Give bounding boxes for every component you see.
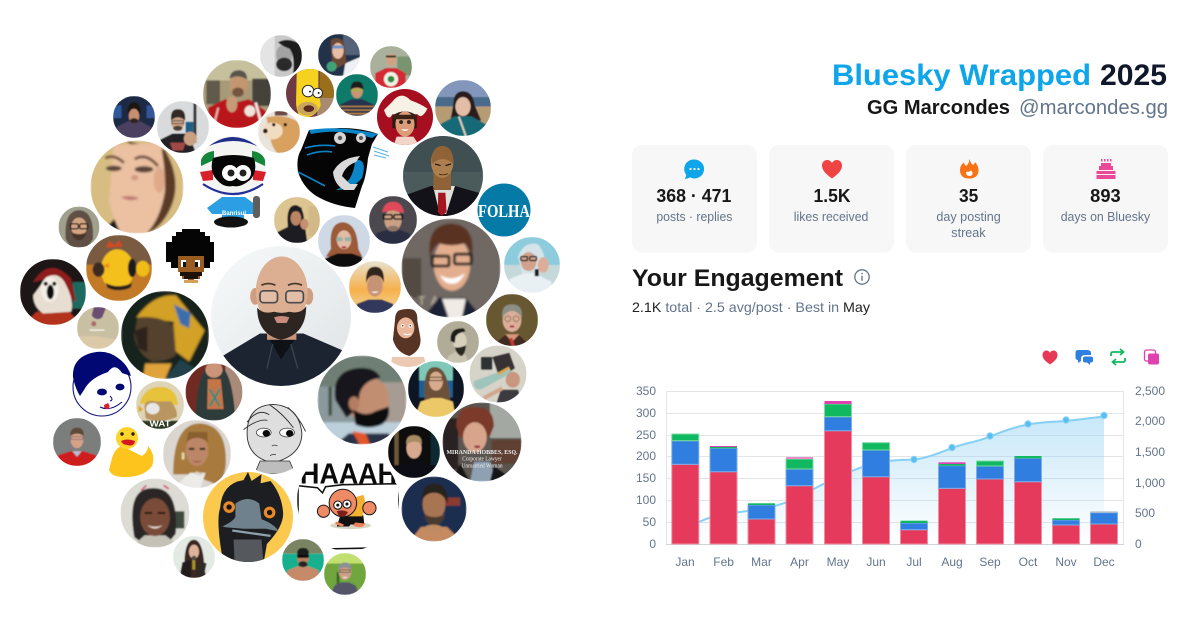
- avatar: racing helmet mascot: Banrisul: [222, 211, 246, 217]
- cumulative area: [685, 416, 1104, 544]
- avatar: black and white man: [260, 35, 302, 77]
- avatar: small painted portrait: [77, 307, 119, 349]
- avatar: beard silhouette drawing: [437, 321, 479, 363]
- stat card: posts and replies: 368 · 471: [656, 186, 731, 206]
- avatar: blue cartoon boy: [73, 352, 131, 416]
- month labels: Feb: [713, 555, 734, 569]
- left axis labels: 0: [649, 537, 656, 551]
- avatar: Miranda Hobbes: Corporate Lawyer: [462, 457, 502, 463]
- stat card: days on Bluesky: days on Bluesky: [1061, 209, 1151, 224]
- avatar: Miranda Hobbes: MIRANDA HOBBES, ESQ.: [446, 449, 518, 456]
- legend: heart: [1042, 350, 1058, 364]
- left axis labels: 350: [636, 384, 656, 398]
- avatar: Miranda Hobbes: Unmarried Woman: [461, 463, 503, 469]
- stat card: day posting streak: [906, 145, 1031, 252]
- icon: chat bubble: [684, 159, 704, 179]
- avatar: Girl with a Pearl Earring style: [121, 291, 209, 379]
- avatar: mirror selfie man: [157, 101, 209, 153]
- avatar: emu illustration: [203, 472, 293, 562]
- avatar: frog with hard hat: WAT: [149, 420, 171, 429]
- avatar: Homer Simpson: [286, 69, 334, 117]
- avatar: man in red shirt: [370, 46, 412, 88]
- avatar: man on teal background: [336, 74, 378, 116]
- avatar: man at sunset: [349, 261, 401, 313]
- month labels: Oct: [1019, 555, 1038, 569]
- month labels: [675, 555, 1115, 569]
- avatar: racing helmet mascot: [200, 136, 266, 228]
- legend: reposts: [1111, 349, 1125, 365]
- avatar: red-haired woman: [318, 215, 370, 267]
- bar: Jul: [900, 521, 928, 544]
- legend: quotes: [1144, 350, 1159, 364]
- icon: info: [855, 270, 869, 284]
- left axis labels: 300: [636, 406, 656, 420]
- line points: [911, 412, 1107, 463]
- avatar: woman in white hood: [504, 237, 560, 293]
- avatar: woman with sunglasses: [318, 34, 360, 76]
- bar: Jun: [862, 443, 890, 544]
- bar: Sep: [976, 461, 1004, 544]
- legend: replies: [1076, 350, 1093, 365]
- month labels: Mar: [751, 555, 772, 569]
- icon: heart: [822, 160, 842, 178]
- avatar: man in red cap: [369, 196, 417, 244]
- month labels: Sep: [979, 555, 1001, 569]
- avatar: HAAAA comic: [297, 464, 399, 550]
- bar: Jan: [672, 434, 699, 544]
- engagement summary: 2.1K total · 2.5 avg/post · Best in May: [632, 299, 870, 315]
- avatar: golden dog: [258, 111, 300, 153]
- user name and handle: @marcondes.gg: [1019, 97, 1168, 119]
- avatar: man in red sweater: [53, 418, 101, 466]
- month labels: Apr: [790, 555, 809, 569]
- right axis labels: [1135, 384, 1165, 551]
- avatar: woman with glasses: [486, 294, 538, 346]
- icon: birthday cake: [1096, 159, 1116, 179]
- avatar: man with guitar: [470, 346, 526, 402]
- bar: May: [824, 401, 852, 544]
- left axis labels: 250: [636, 428, 656, 442]
- avatar: glamorous woman with blonde hair: [163, 420, 231, 488]
- avatar: man in white cowboy hat: [377, 89, 433, 145]
- avatar: man in black shirt: [388, 426, 440, 478]
- right axis labels: 2,000: [1135, 414, 1165, 428]
- title: Bluesky Wrapped 2025: 2025: [1100, 59, 1167, 92]
- heading: Your Engagement: Your Engagement: [632, 265, 843, 292]
- month labels: Jul: [906, 555, 922, 569]
- avatar: yellow robot chick: [86, 235, 152, 301]
- avatar: big selfie woman: [90, 140, 184, 234]
- stat card: likes received: [769, 145, 894, 252]
- avatar: sketched grumpy kid: [243, 404, 306, 474]
- right axis labels: 0: [1135, 537, 1142, 551]
- avatar: smiling man with glasses: [402, 218, 500, 318]
- avatar: woman selfie with hand: [274, 197, 320, 243]
- right axis labels: 1,000: [1135, 476, 1165, 490]
- stat card: days on Bluesky: 893: [1090, 186, 1121, 206]
- right axis labels: 1,500: [1135, 445, 1165, 459]
- left axis labels: 200: [636, 449, 656, 463]
- stat card: likes received: likes received: [794, 209, 868, 224]
- stat card: posts and replies: [632, 145, 757, 252]
- avatar: man in red jacket: [203, 60, 271, 128]
- avatar: Carolina Panthers logo: [297, 128, 389, 208]
- avatar: HAAAA comic: HAAAH: [300, 459, 397, 491]
- bar: Oct: [1014, 456, 1042, 544]
- avatar: long-haired man in yellow shirt: [408, 361, 464, 417]
- stat card: days on Bluesky: [1043, 145, 1168, 252]
- right axis labels: 500: [1135, 506, 1155, 520]
- bar: Nov: [1052, 518, 1080, 544]
- avatar: frog with hard hat: [136, 381, 184, 429]
- month labels: Nov: [1055, 555, 1077, 569]
- month labels: Jan: [675, 555, 695, 569]
- bar: Mar: [748, 503, 775, 544]
- avatar: Miranda Hobbes: [442, 402, 522, 482]
- avatar: woman with patterned top: [186, 362, 242, 420]
- user name and handle: [867, 97, 1168, 119]
- bar: Feb: [710, 446, 737, 544]
- avatar: man with dark background: [113, 96, 155, 138]
- avatar: bald man with hand on chin: [402, 476, 466, 542]
- stacked bars: [672, 401, 1118, 544]
- avatar: Art the Clown in santa suit: [20, 259, 86, 325]
- bar: Apr: [786, 457, 813, 544]
- avatar: man with long hair and glasses: [58, 206, 100, 248]
- avatar: smiling man with glasses: I T A: [409, 294, 439, 308]
- left axis labels: 100: [636, 493, 656, 507]
- right axis labels: 2,500: [1135, 384, 1165, 398]
- month labels: Jun: [866, 555, 886, 569]
- bar: Dec: [1090, 511, 1118, 544]
- chart legend icons: [1042, 349, 1159, 365]
- avatar: rubber duck: [109, 427, 153, 477]
- avatar cloud: [20, 34, 560, 595]
- avatar: man in sunglasses at sea: [282, 539, 324, 581]
- left axis labels: 150: [636, 471, 656, 485]
- month labels: Dec: [1093, 555, 1115, 569]
- bar: Aug: [938, 462, 966, 544]
- month labels: May: [827, 555, 849, 569]
- chart: monthly engagement bars and cumulative line: [636, 384, 1165, 569]
- avatar: woman at the beach: [435, 80, 491, 136]
- avatar: Lex Luthor cartoon: [403, 136, 483, 216]
- left axis labels: 50: [643, 515, 656, 529]
- month labels: Aug: [941, 555, 963, 569]
- stat card: day posting streak: 35: [959, 186, 978, 206]
- stat card: day posting streak: streak: [951, 225, 986, 240]
- avatar: smiling man in green park: [324, 553, 366, 595]
- cumulative line: [685, 416, 1104, 529]
- stat card: likes received: 1.5K: [814, 186, 850, 206]
- avatar: Folha logo: FOLHA: [478, 201, 530, 221]
- left axis labels: [636, 384, 656, 551]
- avatar: central portrait man: [211, 246, 351, 386]
- title: Bluesky Wrapped 2025: Bluesky Wrapped: [832, 59, 1091, 92]
- user name and handle: GG Marcondes: [867, 97, 1010, 119]
- avatar: dreadlocks man: [120, 478, 190, 548]
- avatar: man with beard looking right: [318, 356, 406, 444]
- avatar: woman with microphone: [173, 536, 215, 578]
- stat card: day posting streak: day posting: [936, 209, 1001, 224]
- chart grid: [666, 391, 1124, 544]
- avatar: Folha logo: [478, 184, 530, 236]
- avatar: pixel art afro: [166, 229, 214, 283]
- stat card: posts and replies: posts · replies: [656, 209, 733, 224]
- avatar: caricature with big beard: [391, 309, 426, 367]
- icon: flame: [960, 159, 978, 178]
